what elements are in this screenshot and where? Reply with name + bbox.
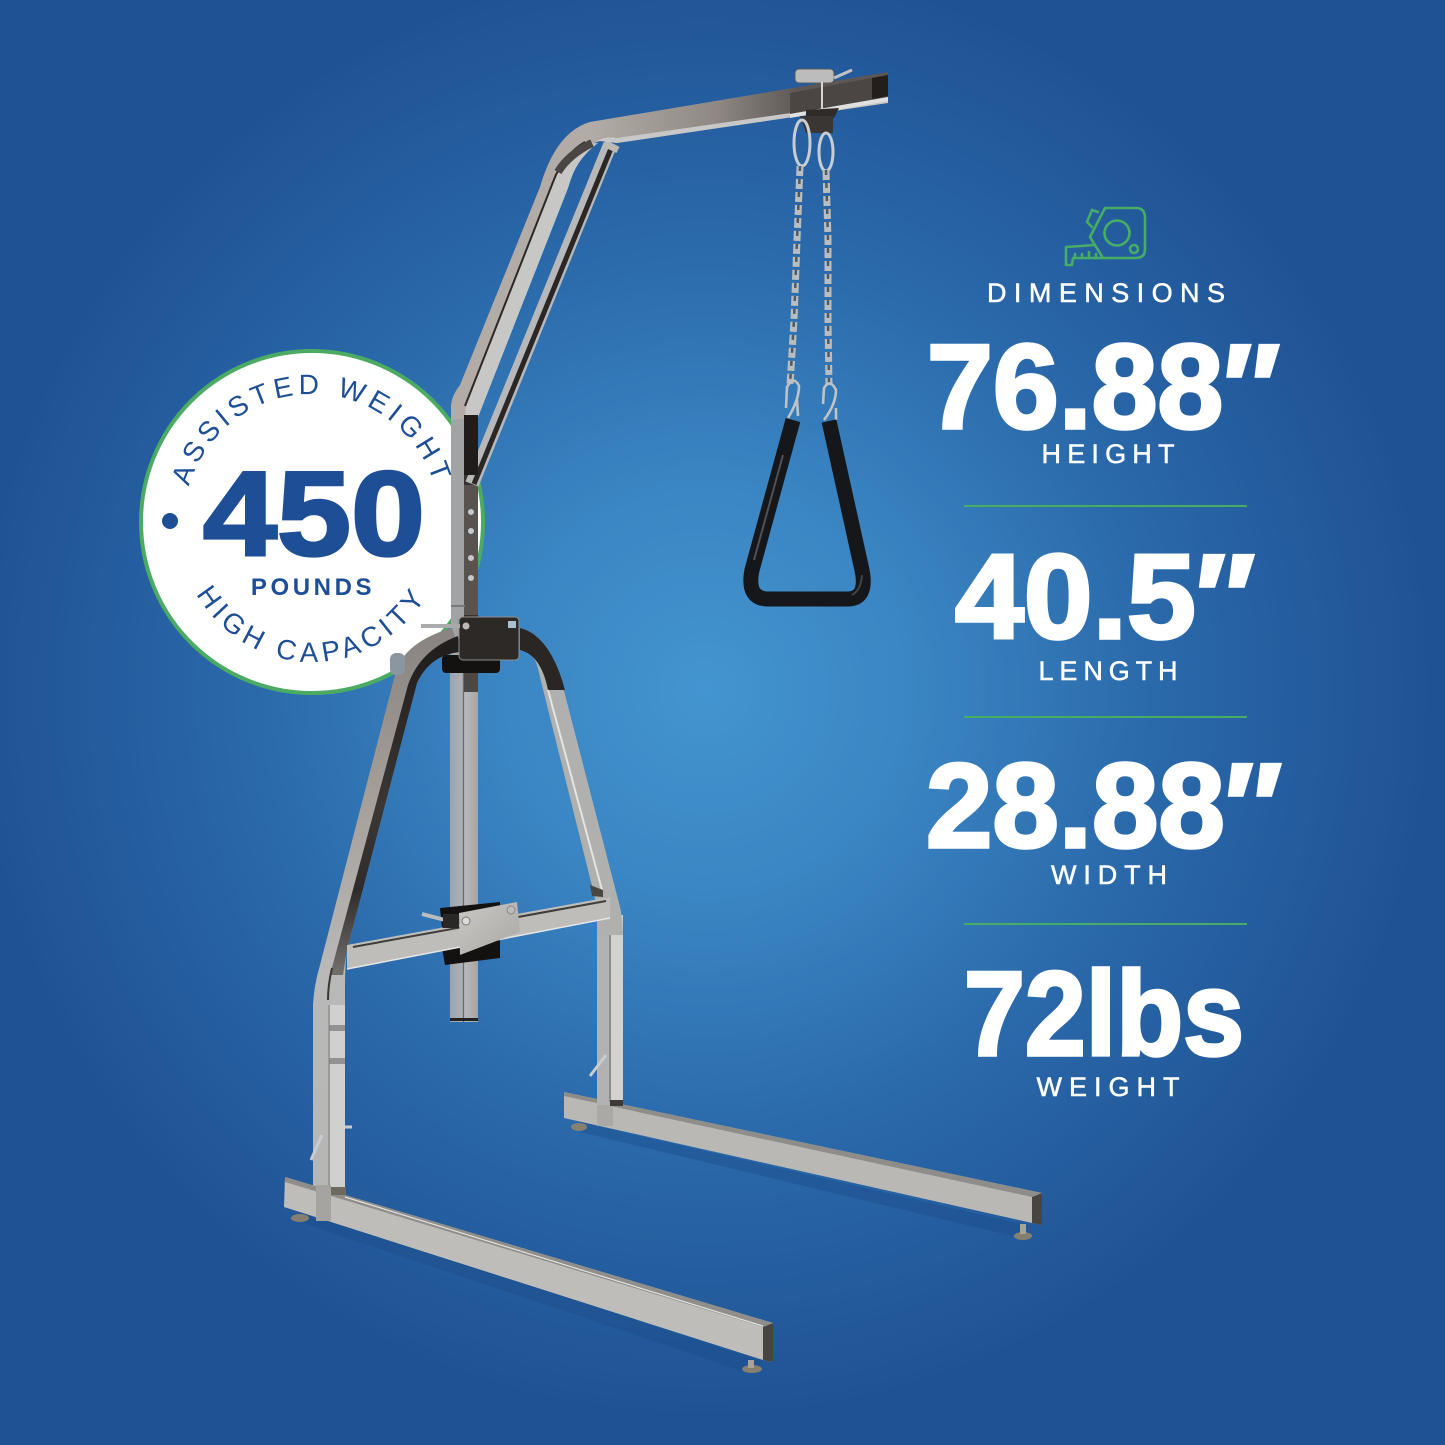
upright brace [472, 143, 618, 484]
trapeze stand product [284, 69, 1042, 1373]
weight capacity badge [139, 349, 485, 695]
crossbar [347, 897, 610, 969]
heading: dimensions: DIMENSIONS [987, 278, 1225, 308]
trapeze handle [751, 420, 863, 599]
top clamp plate [390, 617, 519, 675]
badge number: 450 [203, 447, 425, 581]
badge bullet [162, 513, 178, 529]
height value: 76.88″ [927, 320, 1280, 454]
dimensions column [926, 208, 1282, 1102]
divider [964, 505, 1247, 507]
weight label: WEIGHT [1036, 1072, 1180, 1102]
crossbar clamp plate [422, 902, 520, 955]
crossbar clamp back [440, 902, 500, 965]
overhead arm [451, 72, 888, 475]
width value: 28.88″ [926, 739, 1282, 873]
front foot [284, 1177, 773, 1373]
weight value: 72lbs [964, 947, 1244, 1081]
length value: 40.5″ [955, 530, 1255, 664]
leg pins [311, 1055, 606, 1160]
badge arc text: high capacity: HIGH CAPACITY [197, 584, 421, 662]
base frame arch: right leg [520, 628, 623, 935]
rear foot [564, 1092, 1042, 1240]
rear leg vertical [597, 915, 623, 1106]
base frame arch: left leg [313, 628, 460, 1190]
floor shadow tint [300, 1122, 1030, 1372]
length label: LENGTH [1038, 656, 1178, 686]
arm end [790, 69, 888, 133]
icon: tape measure [1066, 208, 1145, 265]
badge unit: POUNDS [251, 574, 375, 601]
trapeze chains [786, 120, 836, 420]
divider [964, 923, 1247, 925]
width label: WIDTH [1051, 860, 1167, 890]
mast adjustment holes [468, 508, 474, 582]
divider [964, 716, 1247, 718]
mast lower section [450, 640, 478, 1022]
badge arc text: assisted weight: ASSISTED WEIGHT [174, 374, 451, 486]
height label: HEIGHT [1042, 439, 1174, 469]
mast upper section [451, 410, 478, 640]
